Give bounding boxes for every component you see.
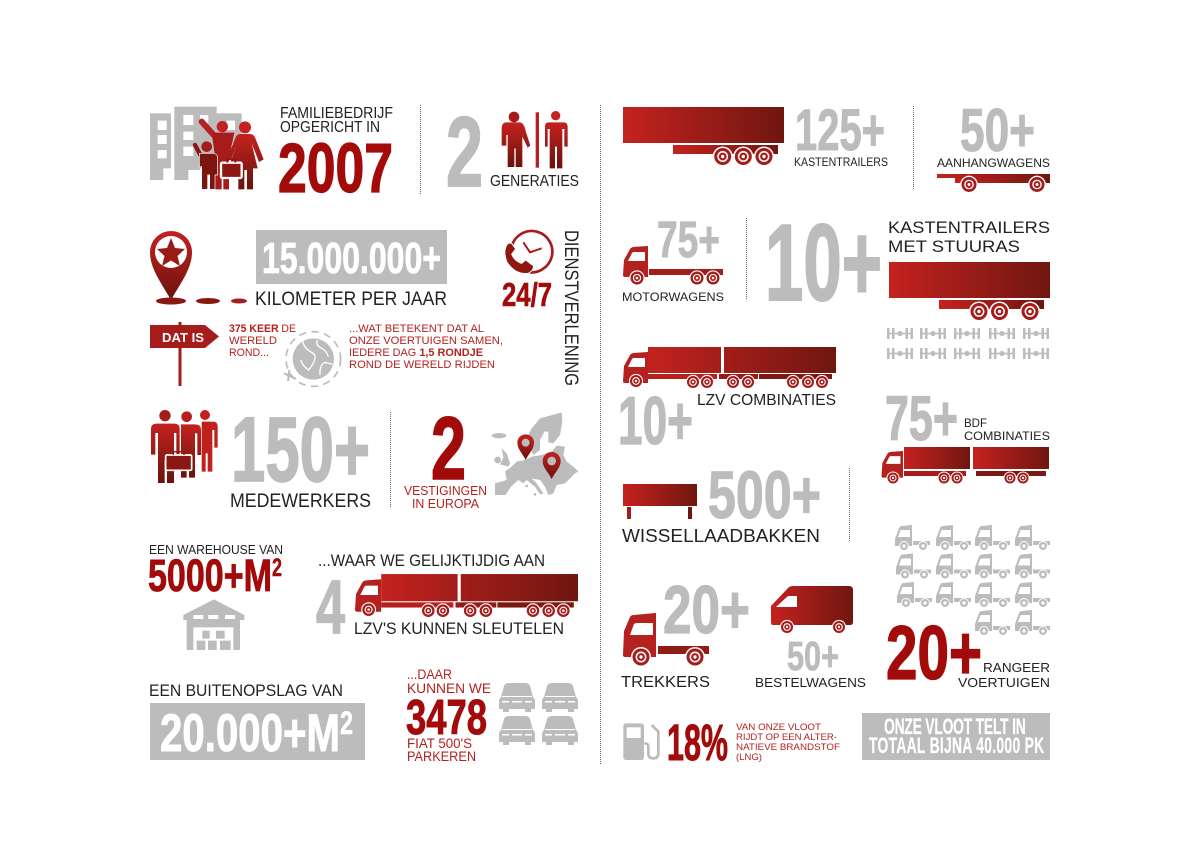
sign: dat is: DAT IS [162, 330, 204, 345]
icon: lzv truck [623, 347, 836, 389]
text: van onze vloot: VAN ONZE VLOOT [736, 722, 821, 733]
number: 150+: 150+ [231, 399, 370, 501]
icon: flat trailer [937, 174, 1050, 193]
icon: two generations [502, 111, 568, 168]
text: wat betekent dat al: ...WAT BETEKENT DAT AL [349, 323, 484, 335]
panel: 2 locations in Europe [404, 398, 578, 511]
number: 2: 2 [446, 96, 483, 207]
callout: 40.000 pk: ONZE VLOOT TELT IN [884, 714, 1026, 739]
panel: 4 lzv [316, 552, 578, 650]
icon: van [771, 586, 853, 634]
text: van onze vloot: NATIEVE BRANDSTOF [736, 742, 840, 753]
number: 3478: 3478 [406, 691, 487, 745]
number: 125+: 125+ [795, 98, 885, 163]
text: van onze vloot [736, 722, 840, 763]
panel: 150+ employees [151, 399, 371, 512]
text: fiat 500's parkeren [407, 735, 476, 764]
panel: dat is world trips [150, 322, 503, 386]
panel: 20+ shunting vehicles [886, 525, 1050, 696]
icon: box trailer [623, 107, 784, 167]
text: lzv's kunnen sleutelen: LZV'S KUNNEN SLEUTELEN [354, 619, 564, 638]
text: familiebedrijf: FAMILIEBEDRIJF [280, 105, 393, 122]
number: 4: 4 [316, 565, 345, 650]
number: 50+: 50+ [960, 97, 1035, 164]
text: kilometer per jaar: KILOMETER PER JAAR [255, 289, 447, 310]
text: wissellaadbakken: WISSELLAADBAKKEN [622, 526, 820, 546]
number: 500+: 500+ [708, 458, 821, 533]
panel: founded in 2007 [150, 105, 393, 207]
number: 2: 2 [431, 398, 466, 498]
text: kastentrailers met stuuras: MET STUURAS [888, 237, 1020, 256]
text: kastentrailers met stuuras: KASTENTRAILERS [888, 218, 1050, 237]
text: dienstverlening vertical: DIENSTVERLENING [560, 230, 581, 386]
icon: motor truck [623, 246, 723, 286]
icon: europe map with pins [492, 412, 578, 496]
icon: trailer with steering axle [889, 262, 1050, 322]
panel: 10+ lzv combinations [618, 347, 836, 459]
text: opgericht in: OPGERICHT IN [280, 119, 380, 136]
text: 375 keer de wereld rond: ROND... [229, 347, 269, 359]
number: 2007: 2007 [278, 129, 393, 207]
icon: warehouse [183, 599, 244, 650]
text: kastentrailers met stuuras [888, 218, 1050, 256]
icon: lzv truck [355, 574, 578, 618]
number: 75+: 75+ [657, 211, 720, 268]
text: vestigingen in europa [404, 483, 487, 511]
icon: axle grid [887, 328, 1049, 359]
number: 10+: 10+ [765, 202, 882, 324]
sign: dat is [150, 322, 219, 386]
icon: four cars [499, 683, 578, 745]
panel: warehouse [148, 543, 283, 650]
callout: 40.000 pk [862, 713, 1050, 760]
text: daar kunnen we: KUNNEN WE [407, 680, 491, 696]
text: bdf combinaties [964, 418, 1050, 443]
icon: clock with phone [505, 226, 557, 277]
icon: location pin [150, 231, 247, 304]
text: bdf combinaties: COMBINATIES [964, 431, 1050, 443]
icon: bdf truck [882, 447, 1049, 484]
text: wat betekent dat al: ROND DE WERELD RIJDEN [349, 359, 495, 371]
icon: swap body [623, 484, 697, 519]
panel: 125+ box trailers [623, 98, 888, 169]
text: lzv combinaties: LZV COMBINATIES [697, 392, 836, 409]
panel: 10+ trailers with steering axle [765, 202, 1050, 359]
text: medewerkers: MEDEWERKERS [230, 491, 371, 512]
callout: 40.000 pk: TOTAAL BIJNA 40.000 PK [869, 733, 1045, 758]
icon: buildings [150, 107, 242, 180]
icon: shunting vehicle grid [895, 525, 1050, 636]
panel: fiat 500 parking [406, 666, 578, 764]
panel: 50+ vans [755, 586, 866, 690]
number: 20+: 20+ [886, 611, 982, 696]
number: 50+: 50+ [787, 633, 839, 679]
text: een buitenopslag van: EEN BUITENOPSLAG VAN [149, 682, 343, 700]
panel: 18% alternative fuel [623, 714, 840, 771]
text: 375 keer de wereld rond: WERELD [229, 335, 277, 347]
number: 18%: 18% [667, 714, 728, 771]
icon: tractor truck [623, 613, 709, 667]
number: 10+: 10+ [618, 383, 693, 459]
panel: 500+ swap bodies [622, 458, 821, 546]
text: aanhangwagens: AANHANGWAGENS [937, 156, 1050, 170]
text: bestelwagens: BESTELWAGENS [755, 676, 866, 690]
panel: 75+ motor vehicles [622, 211, 724, 304]
panel: 20+ tractors [621, 572, 750, 691]
text: 375 keer de wereld rond [229, 323, 296, 359]
text: waar we gelijktijdig aan: ...WAAR WE GELIJKTIJDIG AAN [318, 552, 545, 570]
text: van onze vloot: (LNG) [736, 752, 762, 763]
number box: 20.000+m2: 2 [340, 705, 353, 741]
number box: 20.000+m2: 20.000+M [160, 704, 340, 763]
text: rangeer voertuigen [958, 660, 1050, 690]
text: daar kunnen we: ...DAAR [407, 666, 452, 682]
icon: globe with plane [284, 332, 341, 386]
number box: 15.000.000+ [256, 230, 447, 284]
text: van onze vloot: RIJDT OP EEN ALTER- [736, 732, 837, 743]
text: generaties: GENERATIES [490, 173, 579, 190]
text: vestigingen in europa: VESTIGINGEN [404, 483, 487, 498]
icon: employees [151, 410, 218, 483]
number: 75+: 75+ [885, 384, 958, 454]
number: 20+: 20+ [663, 572, 750, 648]
panel: 75+ bdf combinations [882, 384, 1050, 484]
text: motorwagens: MOTORWAGENS [622, 292, 724, 304]
text: fiat 500's parkeren: PARKEREN [407, 748, 476, 764]
text: rangeer voertuigen: VOERTUIGEN [958, 675, 1050, 690]
text: vestigingen in europa: IN EUROPA [412, 496, 479, 511]
text: wat betekent dat al: ONZE VOERTUIGEN SAMEN, [349, 335, 503, 347]
text: bdf combinaties: BDF [964, 418, 987, 430]
text: rangeer voertuigen: RANGEER [983, 660, 1050, 675]
number box: 15.000.000+: 15.000.000+ [262, 234, 441, 283]
panel: 24/7 service [502, 226, 581, 386]
text: trekkers: TREKKERS [621, 674, 710, 691]
panel: 2 generations [446, 96, 579, 207]
panel: outdoor storage [149, 682, 365, 763]
number: 5000+m2: 2 [272, 554, 282, 582]
text: daar kunnen we [407, 666, 491, 696]
number: 24/7: 24/7 [502, 276, 552, 313]
text: wat betekent dat al [349, 323, 503, 371]
icon: fuel pump [623, 723, 658, 760]
icon: family [195, 121, 264, 189]
text: fiat 500's parkeren: FIAT 500'S [407, 735, 472, 751]
panel: kilometers per year [150, 230, 447, 310]
text: wat betekent dat al: IEDERE DAG 1,5 RONDJE [349, 347, 483, 359]
text: kastentrailers: KASTENTRAILERS [794, 157, 888, 169]
text: 375 keer de wereld rond: 375 KEER DE [229, 323, 296, 335]
number: 5000+m2: 5000+M [148, 550, 272, 601]
panel: 50+ trailers [937, 97, 1050, 193]
text: een warehouse van: EEN WAREHOUSE VAN [149, 543, 283, 557]
